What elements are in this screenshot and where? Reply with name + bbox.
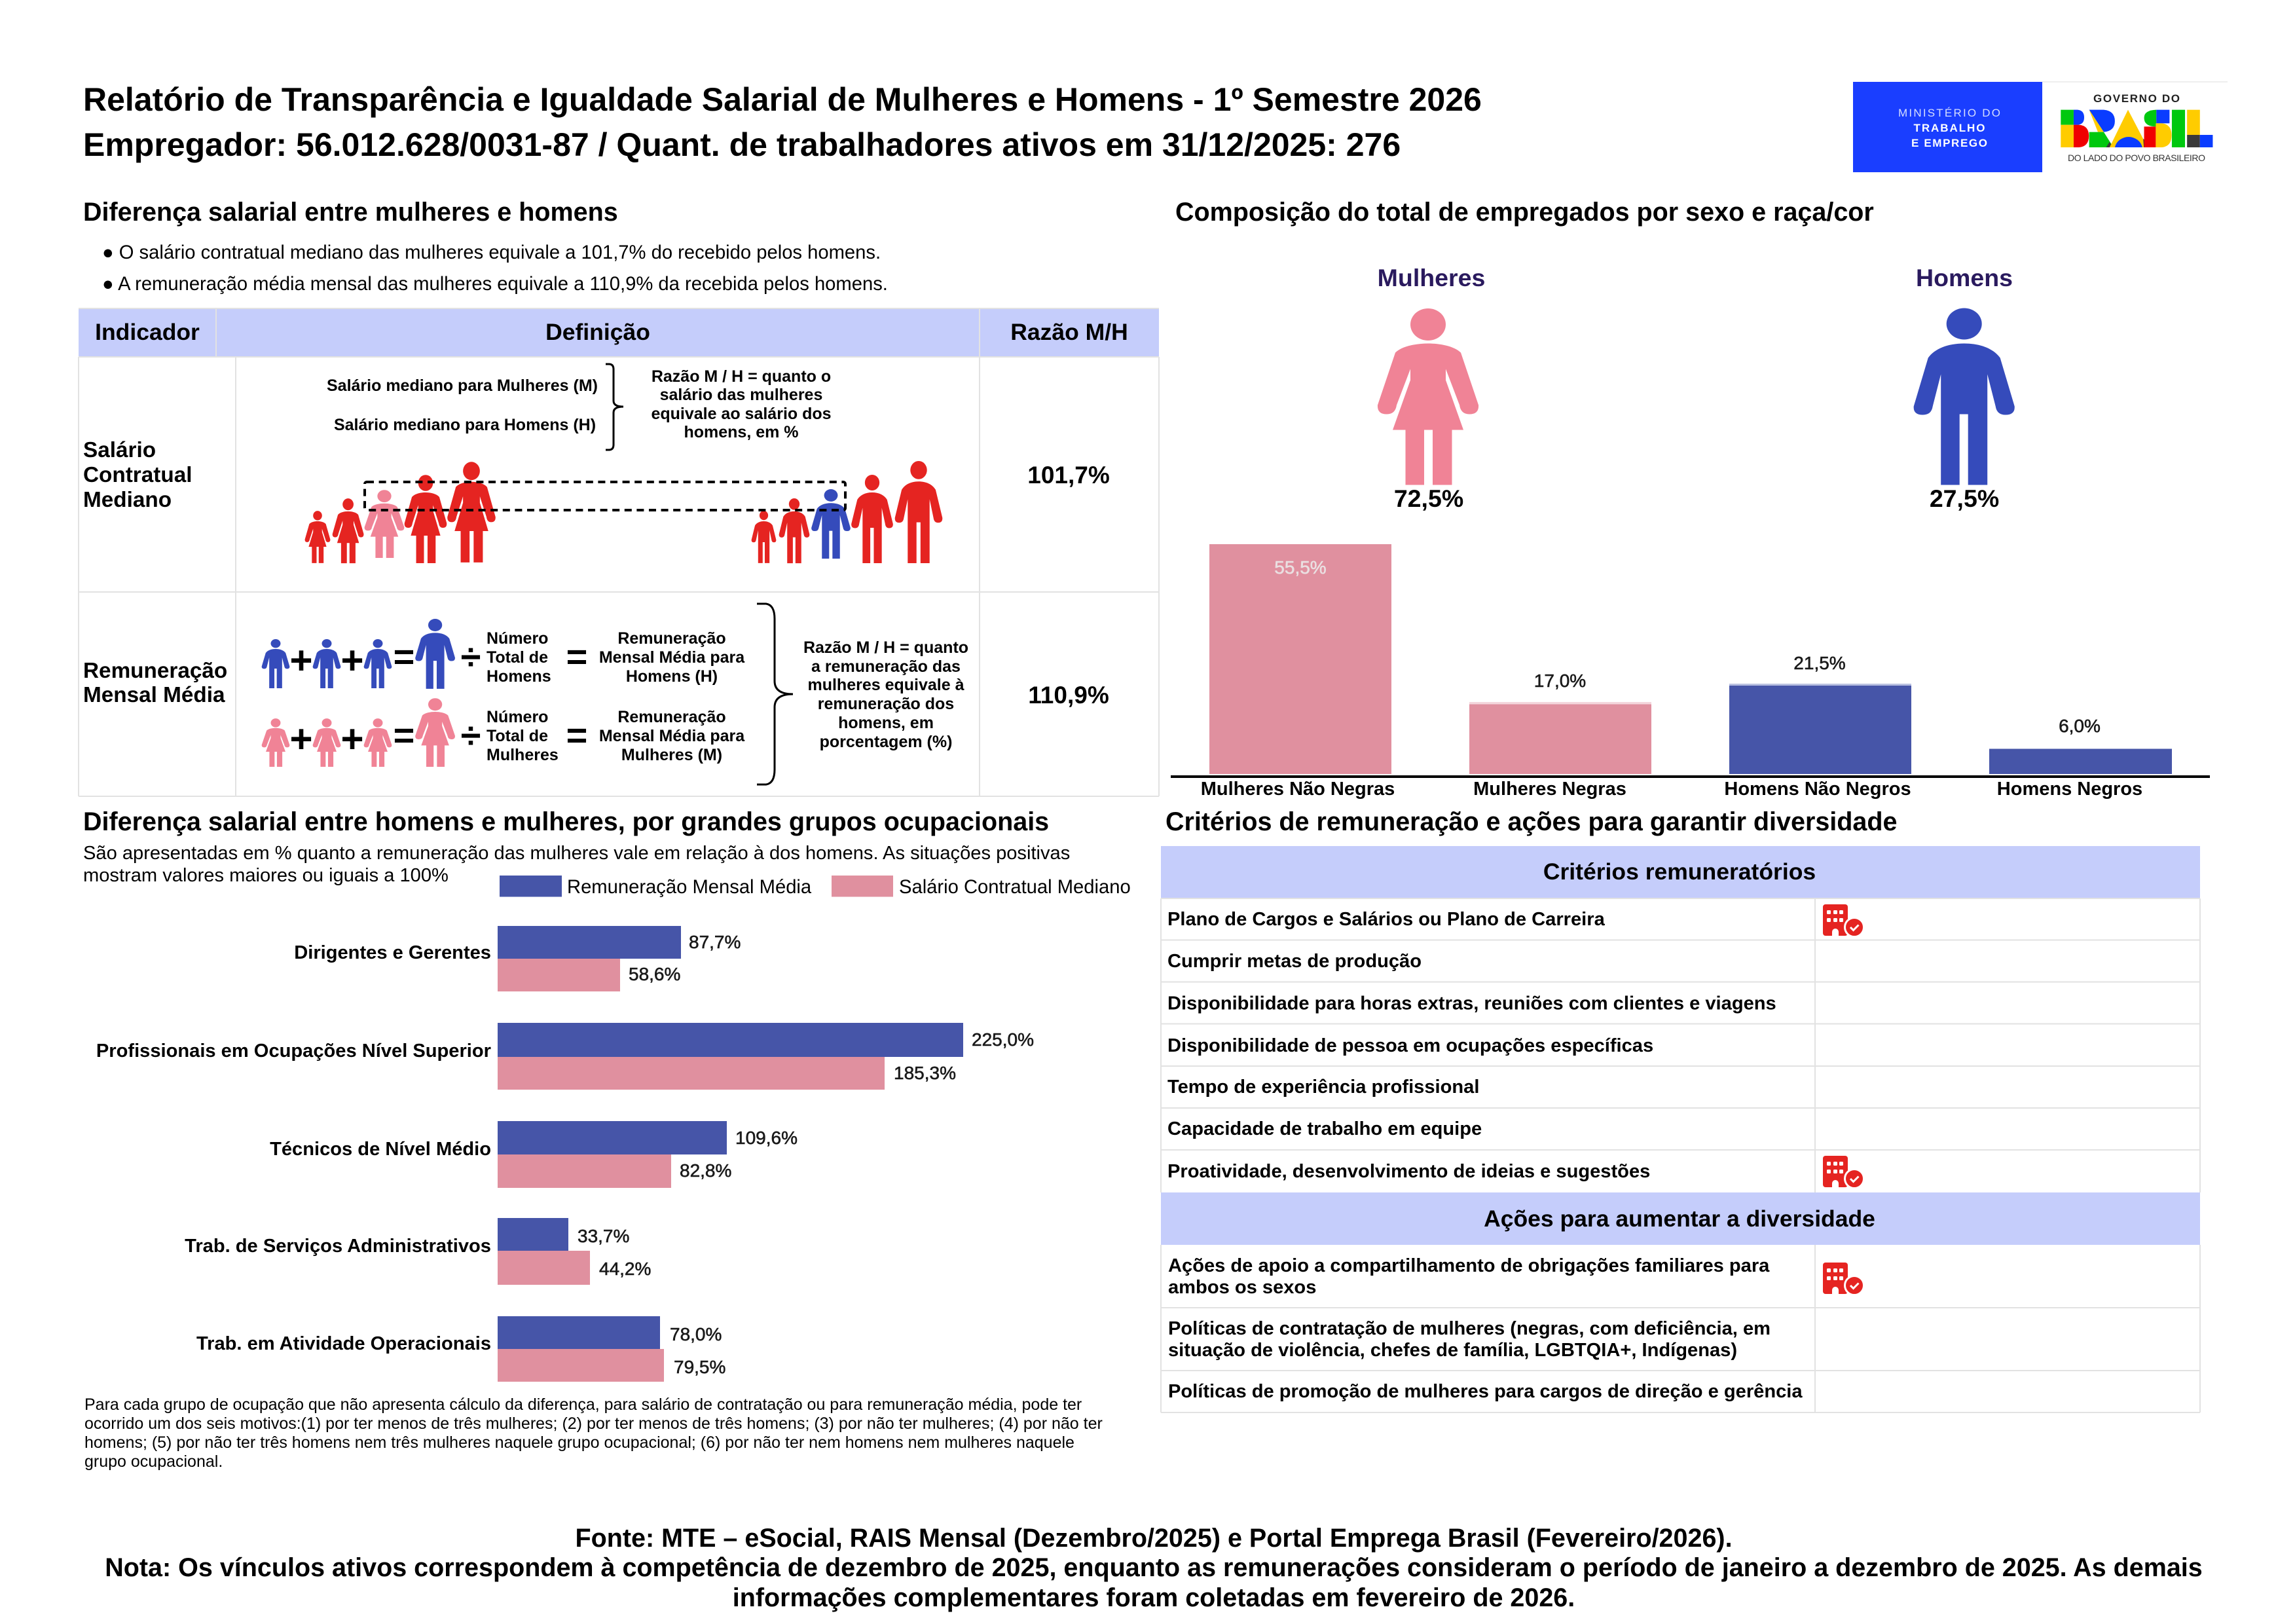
group: atividade operacional: 78,0% [670,1324,722,1344]
row label: salário contratual mediano: Salário [83,438,156,462]
list: critérios: Disponibilidade para horas extras, reuniões com clientes e viagens [1167,993,1776,1014]
table header [95,319,1128,345]
footer: fonte e nota: Nota: Os vínculos ativos correspondem à competência de dezembro de 2025, enquanto as remunerações consideram o período de janeiro a dezembro de 2025. As demais [105,1553,2203,1582]
formula: mulheres: Mulheres (M) [621,746,722,764]
formula: homens: + [289,638,313,682]
header: ações: Ações para aumentar a diversidade [1484,1206,1875,1232]
formula: mulheres: Número [487,708,548,726]
group: profissionais [96,1023,1034,1090]
icon: mulher [1378,308,1478,485]
formula: mulheres: Mulheres [487,746,559,764]
group: profissionais: 225,0% [972,1029,1034,1050]
panel: tabela de indicadores [79,308,1159,796]
list: critérios: Tempo de experiência profissional [1167,1077,1479,1098]
group: dirigentes e gerentes: 87,7% [689,932,741,952]
panel: homens: Homens [1916,264,2013,291]
group: atividade operacional: Trab. em Atividade Operacionais [196,1333,491,1354]
definition: razão M/H salário: homens, em % [684,423,799,441]
heading: composição: Composição do total de empregados por sexo e raça/cor [1175,198,1874,227]
footnote: homens; (5) por não ter três homens nem três mulheres naquele grupo ocupacional; (6) por não ter nem homens nem mulheres naquele [84,1433,1074,1452]
icon: homem [1914,308,2015,485]
list: ações [1168,1255,1803,1402]
formula: homens: Número [487,629,548,648]
dashed comparison box [365,482,845,510]
heading: grupos ocupacionais: Diferença salarial entre homens e mulheres, por grandes grupos ocupacionais [83,807,1049,836]
list: critérios: Cumprir metas de produção [1167,951,1422,972]
definition: razão M/H remuneração: homens, em [838,714,934,732]
formula: mulheres: Mensal Média para [599,727,745,745]
row label: remuneração mensal média [83,659,227,707]
row label: salário contratual mediano: Contratual [83,463,193,487]
list: ações: Políticas de contratação de mulheres (negras, com deficiência, em [1168,1318,1771,1339]
brace: salário mediano [606,364,623,450]
group: técnicos: 109,6% [735,1128,798,1148]
formula: homens: = [394,636,414,677]
panel: homens: 27,5% [1930,485,1999,512]
icons: fila de mulheres [305,462,496,563]
formula: mulheres: + [340,717,364,761]
group: técnicos: Técnicos de Nível Médio [270,1139,491,1160]
definition: razão M/H remuneração: remuneração dos [818,695,954,713]
group: serviços administrativos [185,1218,651,1285]
bar chart: composição por raça/cor: 55,5% [1274,557,1327,578]
list: critérios: Disponibilidade de pessoa em ocupações específicas [1167,1035,1653,1056]
definition: razão M/H salário [651,367,832,441]
formula: homens: Homens (H) [626,667,718,686]
bar chart: grupos ocupacionais [96,926,1034,1382]
list: critérios: Capacidade de trabalho em equipe [1167,1118,1482,1139]
logo: Ministério do Trabalho e Emprego [1853,82,2042,172]
group: serviços administrativos: Trab. de Serviços Administrativos [185,1236,491,1257]
group: atividade operacional: 79,5% [674,1357,725,1377]
list: ações: Políticas de promoção de mulheres para cargos de direção e gerência [1168,1381,1803,1402]
text: explicação: mostram valores maiores ou iguais a 100% [83,865,449,886]
list: critérios: Proatividade, desenvolvimento de ideias e sugestões [1167,1161,1650,1182]
icon: empresa check 3 [1823,1263,1864,1295]
legend [500,876,1131,898]
definition: razão M/H remuneração: porcentagem (%) [820,733,952,751]
list: critérios [1167,909,1776,1182]
definition: razão M/H salário: equivale ao salário dos [651,405,832,423]
logo: Governo do Brasil: DO LADO DO POVO BRASILEIRO [2068,153,2205,163]
bar chart: composição por raça/cor: 6,0% [2059,716,2101,736]
text: explicação [83,843,1070,886]
panel: critérios e ações [1161,846,2200,1412]
footnote: Para cada grupo de ocupação que não apresenta cálculo da diferença, para salário de contratação ou para remuneração média, pode ter [84,1395,1082,1414]
value: razão salário mediano: 101,7% [1027,462,1110,489]
definition: razão M/H remuneração: mulheres equivale à [807,676,964,694]
table header: Indicador [95,319,200,345]
footer: fonte e nota: Fonte: MTE – eSocial, RAIS Mensal (Dezembro/2025) e Portal Emprega Brasil (Fevereiro/2026). [575,1524,1733,1553]
definition: salário mediano texts [327,377,598,434]
group: dirigentes e gerentes: 58,6% [629,964,680,984]
bullet text block [102,242,888,295]
group: dirigentes e gerentes: Dirigentes e Gerentes [294,942,491,963]
formula: mulheres: ÷ [461,714,481,756]
icon: empresa check 1 [1823,904,1864,936]
logo: Governo do Brasil [2042,81,2228,163]
panel: homens [1914,264,2015,512]
logo: Ministério do Trabalho e Emprego: MINISTÉRIO DO [1898,107,2000,119]
formula: homens: ÷ [461,636,481,677]
row label: remuneração mensal média: Mensal Média [83,683,225,707]
title: Empregador: 56.012.628/0031-87 / Quant. de trabalhadores ativos em 31/12/2025: 276 [83,126,1401,163]
legend: Salário Contratual Mediano [899,877,1131,898]
panel: mulheres: Mulheres [1378,264,1485,291]
definition: razão M/H salário: Razão M / H = quanto o [652,367,831,386]
formula: mulheres: = [566,714,587,756]
row label: salário contratual mediano [83,438,193,512]
footer: fonte e nota: informações complementares foram coletadas em fevereiro de 2026. [733,1583,1575,1612]
group: profissionais: Profissionais em Ocupações Nível Superior [96,1041,491,1061]
formula: mulheres: Total de [487,727,548,745]
row label: salário contratual mediano: Mediano [83,488,172,512]
list: ações: Ações de apoio a compartilhamento de obrigações familiares para [1168,1255,1770,1276]
definition: salário mediano texts: Salário mediano para Mulheres (M) [327,377,598,395]
footnote: ocorrido um dos seis motivos:(1) por ter menos de três mulheres; (2) por ter menos de três homens; (3) por não ter mulheres; (4) por não ter [84,1414,1103,1433]
value: razão remuneração média: 110,9% [1028,682,1109,709]
list: ações: ambos os sexos [1168,1277,1316,1298]
header: critérios remuneratórios: Critérios remuneratórios [1543,858,1816,885]
formula: mulheres [262,698,745,767]
formula: mulheres: = [394,714,414,756]
bar chart: composição por raça/cor: Homens Não Negros [1724,779,1911,800]
group: serviços administrativos: 33,7% [578,1226,629,1246]
group: profissionais: 185,3% [894,1063,956,1083]
text: explicação: São apresentadas em % quanto a remuneração das mulheres vale em relação à dos homens. As situações positivas [83,843,1070,864]
definition: razão M/H remuneração: Razão M / H = quanto [803,638,968,657]
list: critérios: Plano de Cargos e Salários ou Plano de Carreira [1167,909,1606,930]
formula: mulheres: Remuneração [617,708,726,726]
group: técnicos [270,1121,798,1188]
list: ações: situação de violência, chefes de família, LGBTQIA+, Indígenas) [1168,1340,1737,1361]
bullet text block: ● A remuneração média mensal das mulheres equivale a 110,9% da recebida pelos homens. [102,274,888,295]
group: técnicos: 82,8% [680,1160,731,1181]
icons: fila de homens [752,461,942,563]
logo: Ministério do Trabalho e Emprego: TRABALHO [1913,122,1985,134]
formula: homens: Homens [487,667,551,686]
formula: homens: Remuneração [617,629,726,648]
footnote [84,1395,1103,1471]
bar chart: composição por raça/cor: Mulheres Negras [1473,779,1626,800]
table header: Definição [545,319,650,345]
bar chart: composição por raça/cor [1171,544,2210,800]
heading: diferença salarial: Diferença salarial entre mulheres e homens [83,198,618,227]
row label: remuneração mensal média: Remuneração [83,659,227,683]
bar chart: composição por raça/cor: 21,5% [1793,653,1846,673]
bar chart: composição por raça/cor: Mulheres Não Negras [1201,779,1395,800]
title: Relatório de Transparência e Igualdade Salarial de Mulheres e Homens - 1º Semestre 2026 [83,81,1482,118]
panel: mulheres [1378,264,1485,512]
footer: fonte e nota [105,1524,2203,1612]
logo: Ministério do Trabalho e Emprego: E EMPREGO [1911,137,1987,149]
formula: homens: Mensal Média para [599,648,745,667]
legend: Remuneração Mensal Média [567,877,812,898]
title [83,81,1482,163]
formula: homens: + [340,638,364,682]
formula: homens: = [566,636,587,677]
formula: mulheres: + [289,717,313,761]
heading: critérios: Critérios de remuneração e ações para garantir diversidade [1166,807,1897,836]
icon: empresa check 2 [1823,1156,1864,1188]
group: serviços administrativos: 44,2% [599,1259,651,1279]
group: atividade operacional [196,1316,725,1382]
formula: homens [262,619,745,689]
formula: homens: Total de [487,648,548,667]
definition: salário mediano texts: Salário mediano para Homens (H) [334,416,596,434]
definition: razão M/H salário: salário das mulheres [660,386,822,404]
bullet text block: ● O salário contratual mediano das mulheres equivale a 101,7% do recebido pelos homens. [102,242,881,263]
bar chart: composição por raça/cor: 17,0% [1534,671,1586,691]
definition: razão M/H remuneração: a remuneração das [811,657,961,676]
bar chart: composição por raça/cor: Homens Negros [1997,779,2142,800]
group: dirigentes e gerentes [294,926,741,991]
footnote: grupo ocupacional. [84,1452,223,1471]
logo: Governo do Brasil: GOVERNO DO [2093,92,2180,105]
panel: mulheres: 72,5% [1394,485,1463,512]
table header: Razão M/H [1010,319,1128,345]
brace: remuneração [757,604,793,784]
definition: razão M/H remuneração [803,638,968,751]
